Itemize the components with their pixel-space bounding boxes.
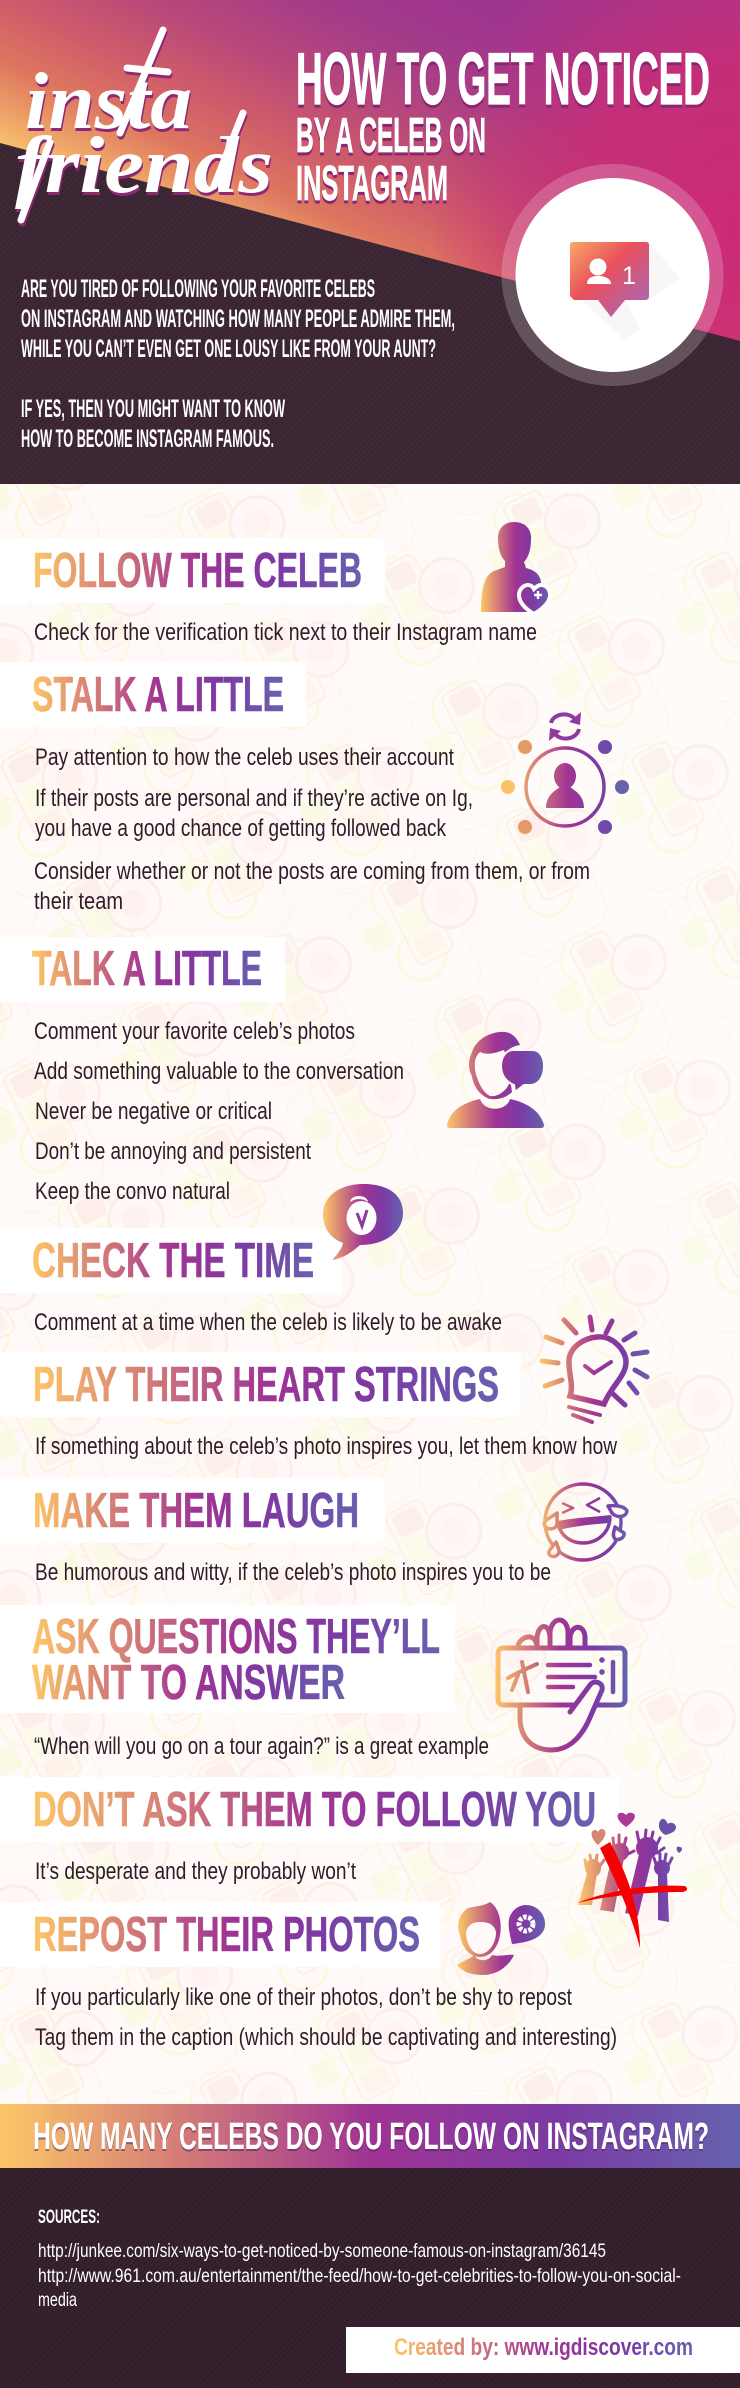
section: follow the celeb <box>0 522 550 646</box>
section: talk a little: Add something valuable to the conversation <box>34 1058 404 1085</box>
icon: man with speech bubble <box>447 1032 544 1128</box>
intro text: HOW TO BECOME INSTAGRAM FAMOUS. <box>21 425 274 453</box>
text: source links: media <box>38 2289 77 2311</box>
section: ask questions they'll want to answer: ASK QUESTIONS THEY’LL <box>32 1609 440 1664</box>
section: make them laugh: MAKE THEM LAUGH <box>33 1483 359 1538</box>
section: talk a little: Keep the convo natural <box>35 1178 230 1205</box>
icon: laughing face <box>544 1484 627 1560</box>
title <box>296 39 710 211</box>
intro text: IF YES, THEN YOU MIGHT WANT TO KNOW <box>21 395 285 423</box>
title: INSTAGRAM <box>296 157 448 211</box>
section: stalk a little: Consider whether or not the posts are coming from them, or from <box>34 858 590 885</box>
section: stalk a little: STALK A LITTLE <box>32 667 284 722</box>
section: repost their photos: If you particularly like one of their photos, don’t be shy to repost <box>35 1984 572 2011</box>
section: check the time: CHECK THE TIME <box>32 1233 314 1288</box>
section: talk a little: Comment your favorite celeb’s photos <box>34 1018 355 1045</box>
section: make them laugh: Be humorous and witty, if the celeb’s photo inspires you to be <box>35 1559 551 1586</box>
section: don't ask them to follow you: It’s desperate and they probably won’t <box>35 1858 356 1885</box>
section: stalk a little: you have a good chance of getting followed back <box>35 815 447 842</box>
heading: sources: SOURCES: <box>38 2207 100 2228</box>
logo: insta friends: insta <box>25 58 192 146</box>
icon: person with heart <box>481 522 550 614</box>
section: repost their photos <box>0 1902 617 2051</box>
section: ask questions they'll want to answer <box>0 1605 625 1760</box>
banner: call to action <box>0 2104 740 2168</box>
icon: man with hashtag bubble <box>457 1902 545 1975</box>
icon: follower notification badge <box>502 164 724 386</box>
logo: insta friends: friends <box>15 122 273 210</box>
section: check the time <box>0 1184 502 1336</box>
section: talk a little: Never be negative or critical <box>35 1098 272 1125</box>
section: stalk a little: their team <box>34 888 123 915</box>
section: follow the celeb: Check for the verification tick next to their Instagram name <box>34 619 537 646</box>
section: don't ask them to follow you <box>0 1777 687 1948</box>
section: stalk a little <box>0 662 629 915</box>
icon: hand holding plane ticket <box>498 1620 625 1750</box>
section: play their heart strings: PLAY THEIR HEART STRINGS <box>33 1357 499 1412</box>
section: ask questions they'll want to answer: WANT TO ANSWER <box>32 1655 345 1710</box>
section: play their heart strings <box>0 1317 647 1460</box>
title: BY A CELEB ON <box>296 109 486 163</box>
logo: insta friends <box>15 30 273 220</box>
section: follow the celeb: FOLLOW THE CELEB <box>33 543 362 598</box>
section: repost their photos: REPOST THEIR PHOTOS <box>33 1907 420 1962</box>
section: talk a little: Don’t be annoying and persistent <box>35 1138 311 1165</box>
section: make them laugh <box>0 1478 627 1586</box>
panel: tips background <box>0 484 740 2104</box>
icon: light bulb with check <box>542 1317 647 1422</box>
icon: clock speech bubble <box>323 1184 403 1260</box>
credit box <box>346 2327 740 2373</box>
section: stalk a little: Pay attention to how the celeb uses their account <box>35 744 454 771</box>
section: talk a little <box>0 937 544 1205</box>
icon: follower notification badge: 1 <box>622 262 636 290</box>
icon: person in orbit with refresh arrows <box>501 712 629 834</box>
text: source links <box>38 2240 681 2311</box>
section: stalk a little: If their posts are personal and if they’re active on Ig, <box>35 785 473 812</box>
intro text: ARE YOU TIRED OF FOLLOWING YOUR FAVORITE CELEBS <box>21 275 375 303</box>
section: ask questions they'll want to answer: “When will you go on a tour again?” is a great example <box>34 1733 489 1760</box>
text: source links: http://junkee.com/six-ways-to-get-noticed-by-someone-famous-on-instagram/36145 <box>38 2240 606 2262</box>
panel: header <box>0 0 740 484</box>
section: check the time: Comment at a time when the celeb is likely to be awake <box>34 1309 502 1336</box>
panel: footer <box>0 2168 740 2388</box>
icon: raised hands crossed out <box>577 1813 687 1948</box>
intro text <box>21 275 455 453</box>
section: talk a little: TALK A LITTLE <box>32 941 262 996</box>
